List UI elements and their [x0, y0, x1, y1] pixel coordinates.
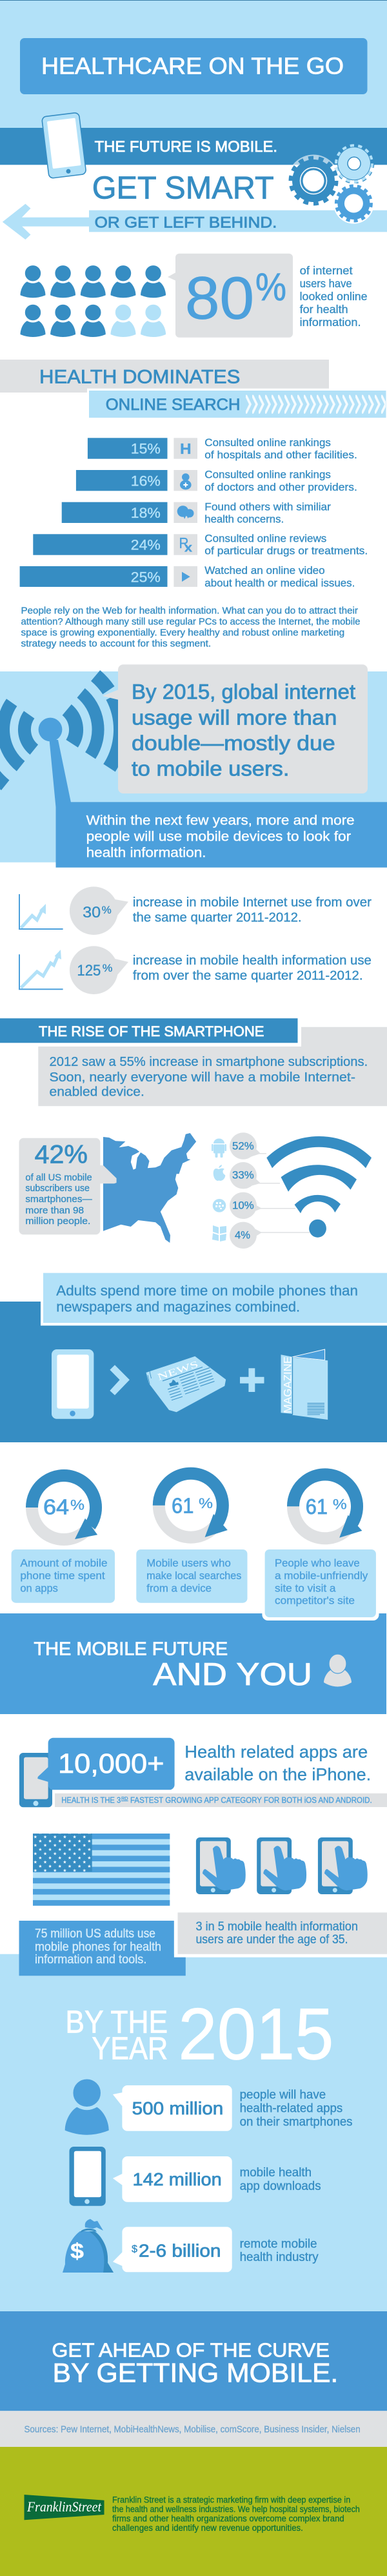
panel: by 2015 callout: usage will more than [132, 706, 337, 730]
text: mobile health information increase: from over the same quarter 2011-2012. [133, 968, 363, 983]
card: apps time: phone time spent [20, 1569, 105, 1582]
paragraph: relying on the web: People rely on the Web for health information. What can you do to attract their [21, 606, 358, 617]
panel: smartphone subscriptions text: Soon, nearly everyone will have a mobile Internet- [49, 1070, 355, 1085]
bar row: 24 percent drug reviews: of particular drugs or treatments. [204, 545, 368, 557]
text: mobile health information increase: increase in mobile health information use [133, 954, 372, 968]
text: app downloads [240, 2166, 321, 2193]
logo: Franklin Street: FranklinStreet [26, 2499, 102, 2515]
callout: 10,000+ [37, 1738, 175, 1790]
callout: 42 percent: of all US mobile [25, 1172, 92, 1183]
callout: 2 to 6 billion: $ [132, 2244, 137, 2254]
icon: blackberry [213, 1199, 226, 1212]
icon: greater than [110, 1365, 130, 1395]
stat bubble: 125 percent [70, 946, 128, 994]
panel: by 2015 callout [103, 664, 368, 793]
text: health related apps [184, 1743, 371, 1784]
text: mobile health information increase [133, 954, 372, 983]
bar row: 24 percent drug reviews: 24% [131, 537, 161, 553]
callout: 3 in 5 users: users are under the age of 35. [196, 1933, 348, 1947]
text: people will have apps: on their smartphones [240, 2116, 352, 2129]
text: mobile internet increase: increase in mobile Internet use from over [133, 895, 372, 910]
callout: 80 percent [168, 254, 293, 338]
bar row: 15 percent hospitals [88, 436, 357, 461]
icon: phone [52, 1349, 94, 1419]
text: about Franklin Street: challenges and identify new revenue opportunities. [112, 2523, 303, 2533]
callout: 2 to 6 billion: 2-6 billion [139, 2241, 221, 2261]
text: of internet users: information. [300, 316, 361, 329]
text: of internet users: of internet [300, 264, 353, 277]
callout: 142 million [113, 2156, 232, 2202]
icon: apple [213, 1165, 225, 1181]
icon: wifi signal [266, 1136, 372, 1238]
panel: next few years text [55, 802, 387, 868]
call to action band [0, 2311, 387, 2411]
donut chart: 64 percent: 64 [43, 1496, 69, 1520]
panel: smartphone subscriptions text: 2012 saw a 55% increase in smartphone subscriptions. [49, 1055, 368, 1069]
callout: 2 to 6 billion [113, 2227, 232, 2272]
card: local searches: Mobile users who [146, 1557, 231, 1569]
text: about Franklin Street: firms and other health organizations overcome complex brand [112, 2514, 344, 2524]
icon: gears [288, 145, 374, 223]
panel: smartphone subscriptions text [38, 1027, 387, 1106]
callout: adults spend more time [43, 1273, 387, 1323]
donut chart: 61 percent local searches: % [199, 1495, 213, 1511]
text: health related apps: Health related apps are [184, 1743, 368, 1762]
icon: money bag [63, 2219, 114, 2273]
callout: 75 million US adults [19, 1921, 186, 1976]
card: local searches: from a device [146, 1582, 212, 1594]
stat bubble: apple 33 percent: 33% [232, 1169, 254, 1181]
callout: 80 percent: % [255, 265, 286, 309]
panel: smartphone subscriptions text: enabled device. [49, 1085, 144, 1099]
panel: the mobile future heading band [0, 1613, 386, 1714]
stat bubble: apple 33 percent [230, 1162, 261, 1189]
callout: 42 percent: more than 98 [25, 1205, 84, 1216]
paragraph: relying on the web: strategy needs to account for this segment. [21, 639, 211, 649]
card: mobile-unfriendly: site to visit a [275, 1582, 336, 1594]
dark banner [0, 128, 387, 165]
panel: next few years text: Within the next few years, more and more [86, 813, 355, 828]
bar row: 25 percent video [20, 564, 355, 589]
panel: by 2015 callout: double—mostly due [132, 731, 335, 755]
text: people will have apps: health-related apps [240, 2102, 342, 2116]
stat bubble: windows 4 percent [230, 1222, 262, 1249]
icon: newspaper [146, 1356, 226, 1412]
paragraph: relying on the web [21, 606, 360, 649]
icon: newspaper: NEWS [156, 1359, 200, 1383]
stat bubble: 30 percent [70, 886, 128, 935]
text: app downloads: app downloads [240, 2180, 321, 2193]
icon: plus [240, 1368, 264, 1392]
heading: by the year 2015: BY THE [65, 2005, 168, 2039]
bar row: 15 percent hospitals: H [180, 440, 192, 457]
connector lines [255, 1154, 310, 1232]
stat bubble: 125 percent: % [103, 962, 112, 974]
card: apps time [12, 1549, 115, 1603]
donut chart: 64 percent: % [70, 1497, 84, 1513]
panel: next few years text: people will use mobile devices to look for [86, 830, 351, 844]
icon: person [65, 2079, 109, 2135]
callout: 3 in 5 users [178, 1912, 387, 1954]
call to action band: BY GETTING MOBILE. [53, 2357, 338, 2387]
title panel [20, 38, 368, 94]
donut chart: 64 percent [32, 1476, 97, 1539]
card: mobile-unfriendly [262, 1549, 379, 1620]
stat bubble: blackberry 10 percent [230, 1192, 262, 1219]
icon: smartphone dark [70, 2147, 106, 2206]
heading band: health dominates: HEALTH DOMINATES [39, 366, 240, 387]
callout: 500 million: 500 million [132, 2098, 223, 2118]
text: people will have apps [240, 2089, 352, 2129]
bar row: 15 percent hospitals: Consulted online rankings [204, 436, 331, 449]
callout: 42 percent: smartphones— [25, 1194, 92, 1205]
bar row: 16 percent doctors: of doctors and other providers. [204, 481, 357, 493]
text: of internet users: for health [300, 303, 348, 316]
callout: 42 percent: 42% [35, 1141, 88, 1169]
icon: android [212, 1139, 226, 1158]
donut chart: 61 percent competitor: % [333, 1496, 347, 1512]
bar row: 25 percent video: 25% [131, 569, 161, 585]
icon: person in grey [324, 1654, 352, 1686]
card: apps time: on apps [20, 1582, 58, 1594]
white strip under grey note [174, 1954, 387, 1958]
stat bubble: 30 percent: % [102, 904, 112, 916]
heading: by the year 2015: YEAR [92, 2031, 168, 2066]
text: of internet users: users have [300, 277, 352, 290]
bar row: 24 percent drug reviews [33, 532, 368, 557]
text: about Franklin Street: Franklin Street is a strategic marketing firm with deep expertise in [112, 2495, 350, 2505]
bar row: 18 percent health concerns: 18% [131, 505, 161, 521]
callout: 42 percent: subscribers use [25, 1183, 90, 1194]
icon: money bag: $ [70, 2239, 84, 2263]
panel: the mobile future heading band: AND YOU [153, 1657, 312, 1692]
callout: 42 percent: million people. [25, 1216, 90, 1227]
top edge line [0, 0, 387, 1]
card: local searches: make local searches [146, 1569, 241, 1582]
bar row: 15 percent hospitals: 15% [131, 441, 161, 457]
text: app downloads: mobile health [240, 2166, 312, 2180]
icon: smartphone [42, 112, 86, 178]
panel: by 2015 callout: to mobile users. [132, 757, 289, 780]
text: remote health industry: remote mobile [240, 2237, 317, 2251]
bar row: 18 percent health concerns: Found others with similiar [204, 500, 331, 513]
heading: by the year 2015: 2015 [178, 1993, 333, 2074]
callout: 500 million [113, 2085, 232, 2131]
text: about Franklin Street: the health and wellness industries. We help hospital systems, biotech [112, 2504, 360, 2514]
note strip: third fastest growing: HEALTH IS THE 3 [61, 1795, 121, 1804]
text: mobile internet increase [133, 895, 372, 925]
icon: magazine [281, 1349, 328, 1420]
callout: 3 in 5 users: 3 in 5 mobile health information [196, 1920, 358, 1934]
footer panel [0, 2447, 387, 2576]
heading: the rise of the smartphone [0, 1018, 298, 1043]
callout: 10,000+: 10,000+ [58, 1748, 164, 1779]
bar row: 15 percent hospitals: of hospitals and other facilities. [204, 449, 357, 461]
logo: Franklin Street [25, 2495, 104, 2520]
icon: phone with touching hand 3 [318, 1837, 368, 1894]
callout: 75 million US adults: 75 million US adults use [35, 1927, 155, 1941]
text: remote health industry: health industry [240, 2251, 319, 2264]
heading: get smart: GET SMART [92, 170, 274, 205]
note strip: third fastest growing: RD [121, 1797, 128, 1801]
stat bubble: android 52 percent: 52% [232, 1140, 254, 1152]
donut chart: 61 percent local searches [159, 1473, 228, 1537]
panel: the mobile future heading band: THE MOBILE FUTURE [34, 1639, 228, 1659]
chart icon: 30 percent growth [19, 894, 63, 929]
panel: by 2015 callout: By 2015, global internet [132, 680, 355, 704]
callout: adults spend more time: Adults spend more time on mobile phones than [56, 1283, 358, 1299]
card: apps time: Amount of mobile [20, 1557, 108, 1569]
callout: adults spend more time: newspapers and magazines combined. [56, 1299, 300, 1315]
sources band [0, 2411, 387, 2447]
stat bubble: 30 percent: 30 [83, 904, 101, 921]
card: mobile-unfriendly: a mobile-unfriendly [275, 1569, 368, 1582]
icon: phone with touching hand 1 [196, 1837, 246, 1894]
panel: next few years text: health information. [86, 845, 206, 860]
text: of internet users [300, 264, 368, 329]
heading: by the year 2015 [65, 1993, 333, 2074]
card: local searches [136, 1549, 248, 1603]
icon: phone with speech pointer [19, 1753, 52, 1807]
text: remote health industry [240, 2237, 319, 2264]
donut chart: 61 percent competitor [293, 1475, 362, 1538]
card: mobile-unfriendly: People who leave [275, 1557, 360, 1569]
panel: by the year 2015 background [0, 1954, 387, 2311]
heading: the rise of the smartphone: THE RISE OF THE SMARTPHONE [39, 1023, 264, 1039]
icon: magazine: MAGAZINE [281, 1356, 294, 1413]
bar row: 16 percent doctors [76, 469, 357, 493]
stat bubble: android 52 percent [230, 1132, 261, 1160]
bar row: 24 percent drug reviews: R [179, 535, 188, 551]
text: of internet users: looked online [300, 290, 368, 303]
panel: signal background [0, 671, 387, 863]
paragraph: relying on the web: attention? Although many still use regular PCs to access the Internet, the mobile [21, 617, 360, 628]
heading band: online search: ONLINE SEARCH [106, 396, 240, 414]
callout: 75 million US adults: information and tools. [35, 1953, 146, 1967]
callout: 75 million US adults: mobile phones for health [35, 1941, 161, 1954]
callout: 142 million: 142 million [133, 2169, 222, 2189]
panel: dark comparison section [0, 1302, 387, 1442]
paragraph: relying on the web: space is growing exponentially. Every healthy and robust online marketing [21, 628, 344, 639]
icon: broadcast antenna [0, 675, 121, 807]
stat bubble: 125 percent: 125 [77, 962, 101, 979]
heading band: health dominates [0, 360, 329, 393]
bar row: 25 percent video: about health or medical issues. [204, 577, 355, 589]
card: mobile-unfriendly: competitor's site [275, 1594, 355, 1606]
bar row: 18 percent health concerns: health concerns. [204, 513, 284, 526]
header section background [0, 0, 387, 128]
callout: 80 percent: 80 [185, 264, 254, 331]
donut chart: 61 percent competitor: 61 [306, 1495, 328, 1519]
heading: the future is mobile: THE FUTURE IS MOBILE. [95, 138, 277, 156]
text: health related apps: available on the iPhone. [184, 1764, 371, 1784]
light banner and left arrow [3, 204, 387, 240]
bar row: 18 percent health concerns [62, 500, 331, 526]
sources band: Sources: Pew Internet, MobiHealthNews, Mobilise, comScore, Business Insider, Nielsen [25, 2424, 361, 2435]
stat bubble: windows 4 percent: 4% [235, 1229, 250, 1242]
text: about Franklin Street [112, 2495, 360, 2533]
bar row: 16 percent doctors: 16% [131, 473, 161, 489]
note strip: third fastest growing [55, 1794, 387, 1807]
text: mobile internet increase: the same quarter 2011-2012. [133, 910, 302, 925]
donut chart: 61 percent local searches: 61 [172, 1494, 194, 1518]
stat bubble: blackberry 10 percent: 10% [232, 1200, 254, 1212]
chart icon: 125 percent growth [19, 950, 63, 989]
icon: phone with touching hand 2 [257, 1837, 306, 1894]
heading: or get left behind: OR GET LEFT BEHIND. [95, 214, 277, 231]
bar row: 24 percent drug reviews: x [184, 541, 192, 555]
call to action band: GET AHEAD OF THE CURVE [52, 2339, 330, 2362]
map: eastern United States [103, 1133, 196, 1243]
people icon grid: 8 of 10 highlighted [21, 265, 166, 337]
title: HEALTHCARE ON THE GO [41, 52, 344, 79]
text: people will have apps: people will have [240, 2089, 326, 2102]
bar row: 24 percent drug reviews: Consulted online reviews [204, 532, 326, 544]
callout: 42 percent [19, 1138, 117, 1234]
icon: windows [212, 1225, 226, 1242]
bar row: 16 percent doctors: Consulted online rankings [204, 469, 331, 481]
icon: american flag [33, 1834, 170, 1906]
heading band: online search [89, 391, 386, 418]
bar row: 25 percent video: Watched an online video [204, 564, 325, 577]
